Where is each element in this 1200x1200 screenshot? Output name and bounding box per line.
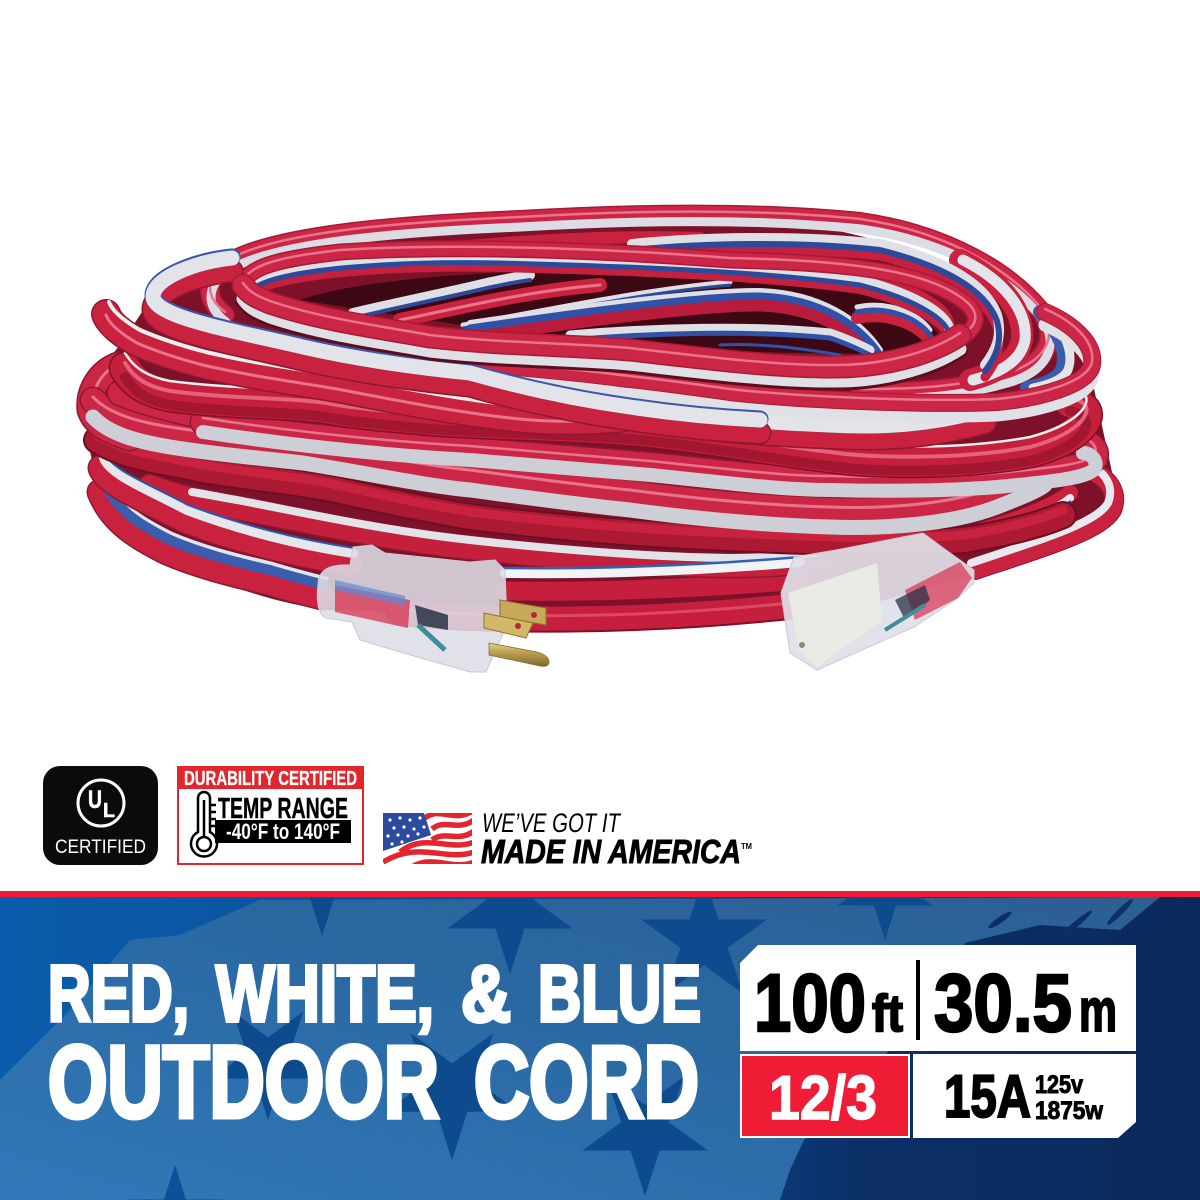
spec panel: electrical rating: 15A <box>944 1063 1031 1130</box>
durability certified badge: DURABILITY CERTIFIED <box>184 768 357 790</box>
made in America tagline: MADE IN AMERICA <box>481 833 741 870</box>
title line 1: WHITE, <box>216 949 434 1038</box>
durability certified badge: -40°F to 140°F <box>226 819 340 844</box>
title line 1: RED, <box>48 949 189 1038</box>
title line 1: BLUE <box>538 949 701 1038</box>
title <box>48 949 701 1139</box>
title line 1 <box>48 949 701 1038</box>
spec panel: electrical rating <box>913 1054 1136 1138</box>
made in America tagline: WE’VE GOT IT <box>482 808 622 838</box>
spec panel: cord length <box>740 945 1136 1051</box>
title line 2: OUTDOOR <box>48 1025 439 1139</box>
title line 1: & <box>461 949 511 1038</box>
durability certified badge <box>177 766 364 864</box>
made in America tagline: TM <box>741 842 752 851</box>
spec panel: cord length: m <box>1079 977 1117 1044</box>
icon: UL mark: U <box>88 786 102 814</box>
made in America tagline <box>481 808 752 870</box>
product photo: coiled extension cord <box>86 212 1118 672</box>
icon: American flag <box>383 813 472 864</box>
UL certified badge: CERTIFIED <box>55 837 146 858</box>
female socket: clear body with white outlet face <box>781 533 974 670</box>
male plug: clear body with brass prongs <box>317 545 549 672</box>
spec panel: cord length: ft <box>872 985 903 1043</box>
icon: UL mark: L <box>103 800 115 822</box>
spec panel: electrical rating: 1875w <box>1035 1097 1104 1125</box>
spec panel: cord length: 30.5 <box>934 958 1072 1049</box>
coil: layered red, white and blue strands <box>86 212 1118 620</box>
spec panel: electrical rating: 125v <box>1035 1071 1083 1099</box>
UL certified badge <box>43 766 158 865</box>
durability certified badge: TEMP RANGE <box>218 793 348 825</box>
title line 2: CORD <box>474 1025 699 1139</box>
spec panel: wire gauge <box>741 1055 909 1137</box>
banner: red rule and blue star background <box>0 891 1200 1200</box>
icon: thermometer <box>191 792 217 857</box>
spec panel: wire gauge: 12/3 <box>769 1064 877 1133</box>
spec panel: cord length: 100 <box>754 958 866 1049</box>
icon: UL mark <box>78 780 124 826</box>
